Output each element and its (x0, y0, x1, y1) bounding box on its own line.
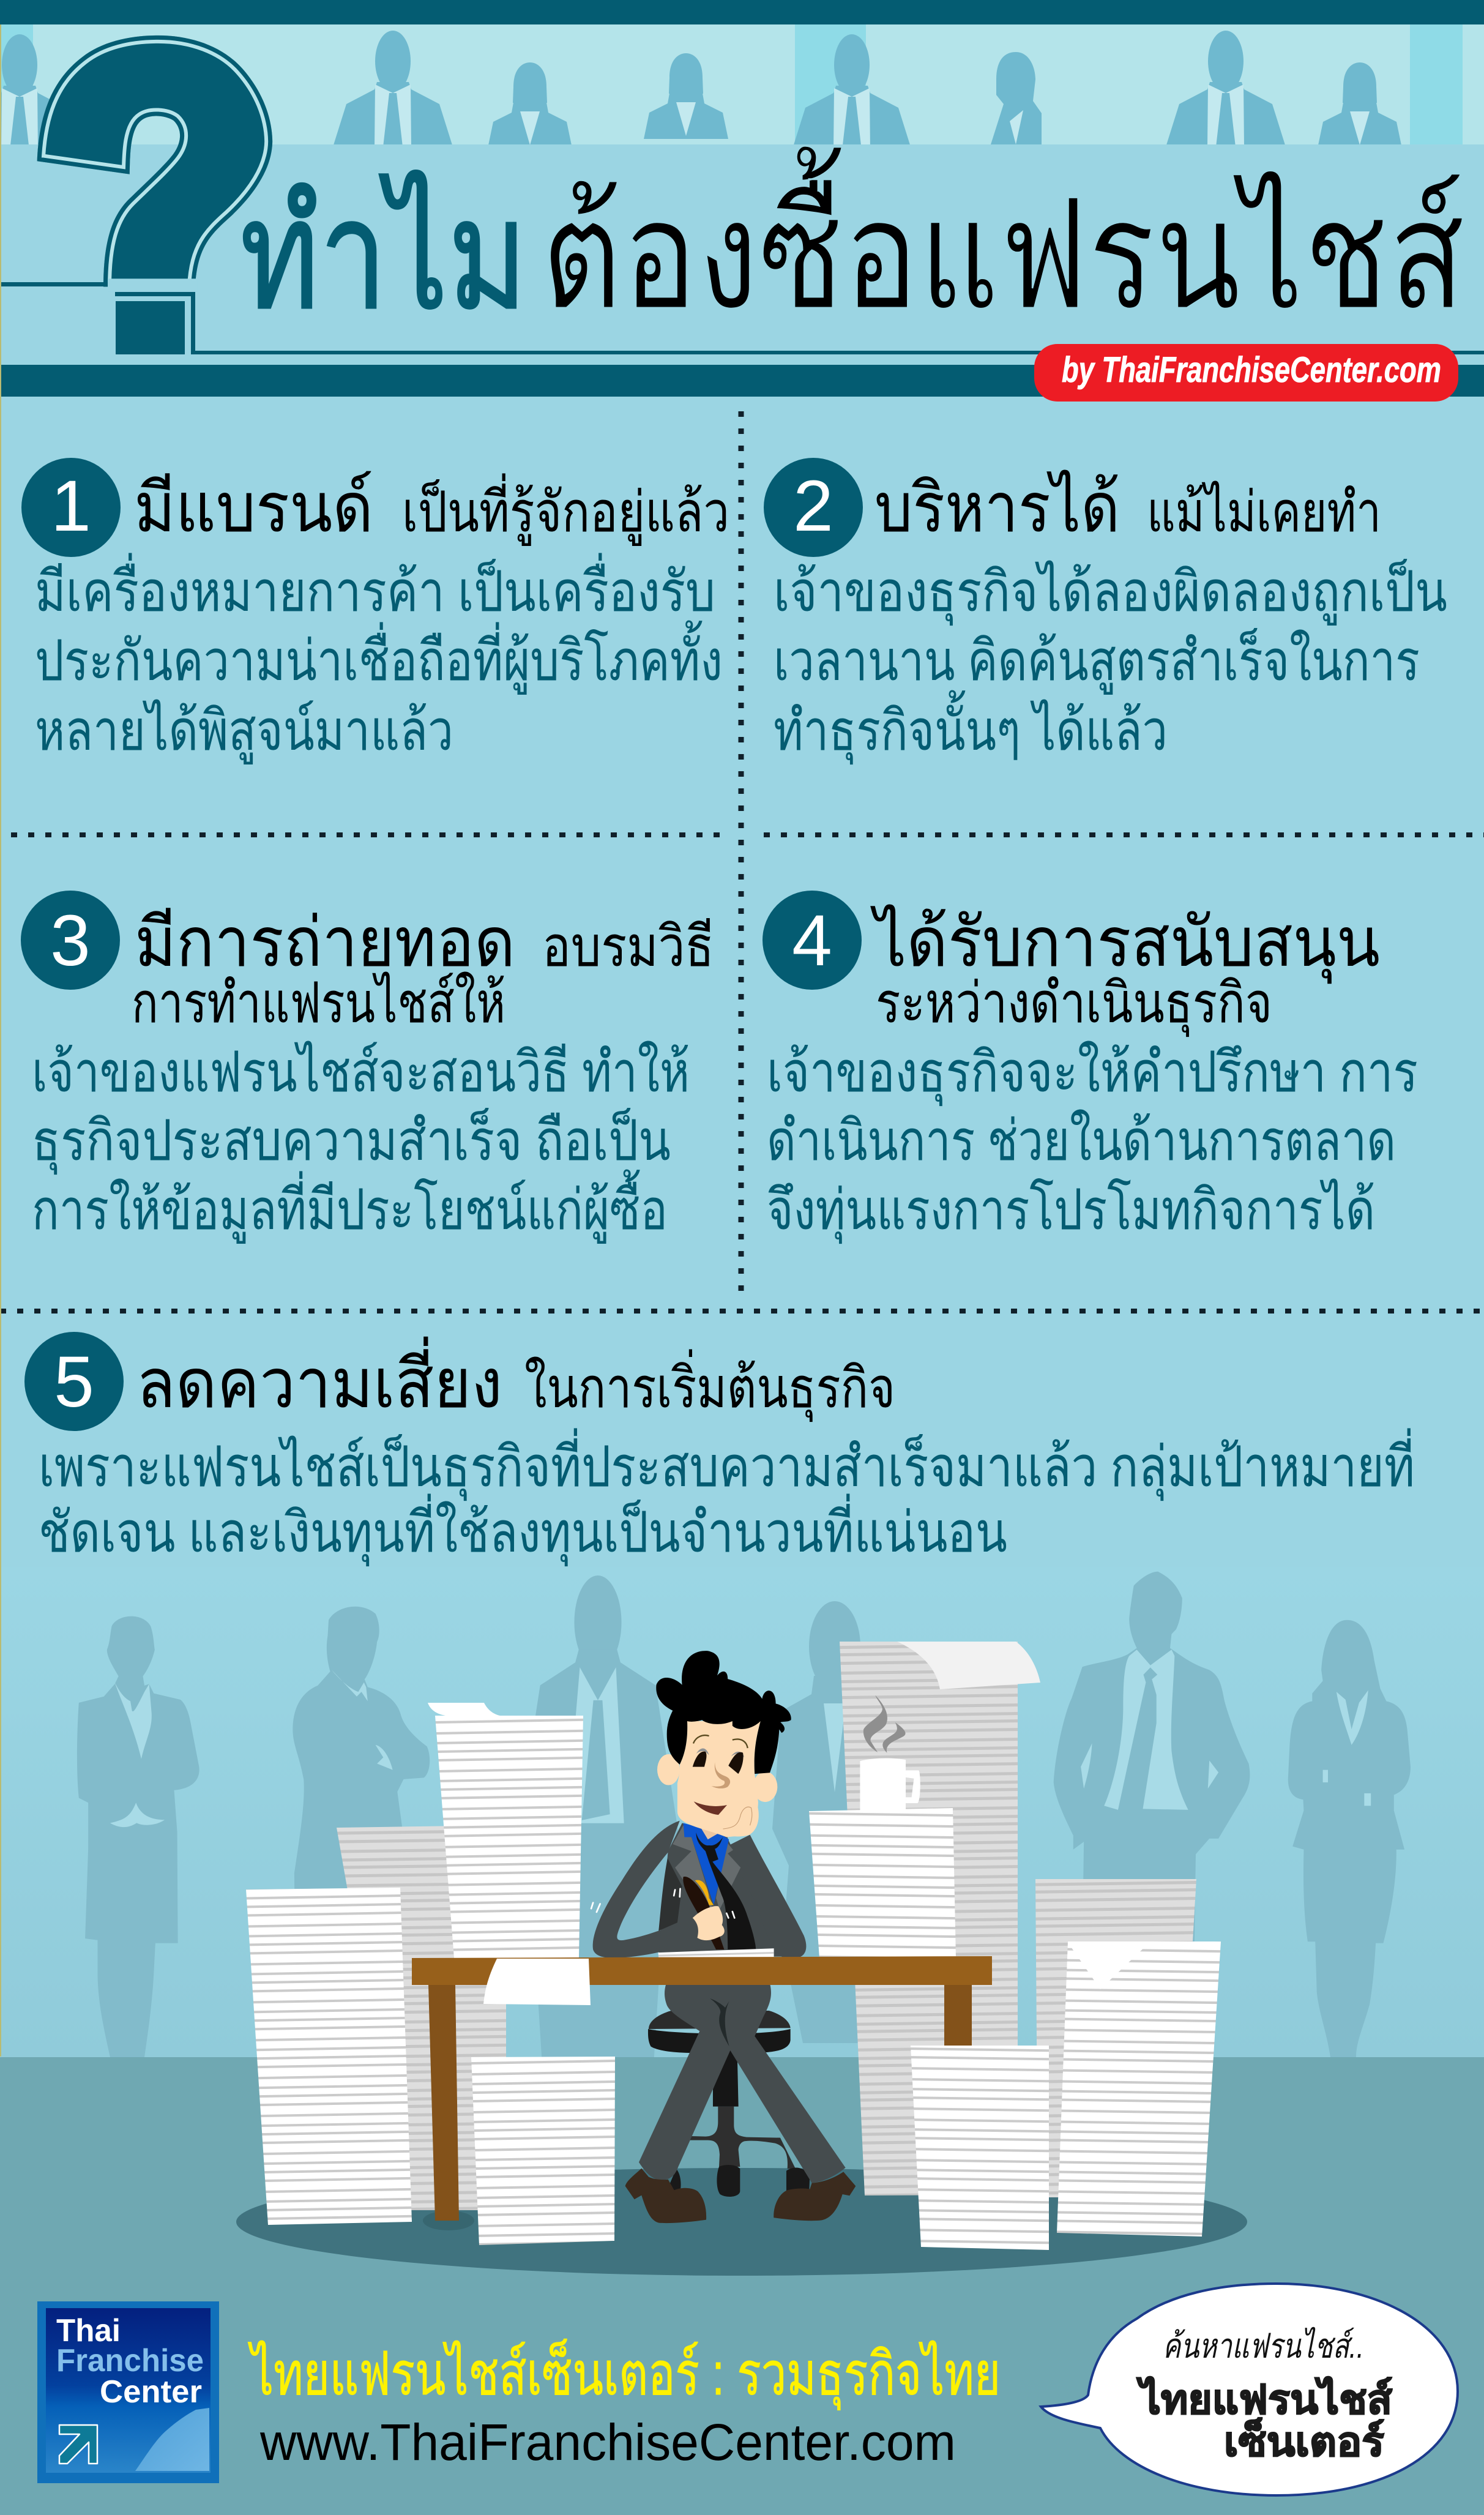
wall tint (1, 1567, 1484, 2057)
logo: Thai Franchise Center: Center (100, 2374, 202, 2410)
front paper stacks (246, 1888, 1221, 2250)
icon: question mark (0, 36, 272, 354)
number badge 3: 3 (50, 900, 91, 981)
number badge 2 (764, 458, 863, 557)
illustration: businessman at desk (591, 1651, 920, 2223)
number badge 5 (24, 1332, 124, 1431)
heading 3: การทำแฟรนไชส์ให้ (132, 972, 505, 1034)
number badge 5: 5 (54, 1342, 94, 1422)
number badge 1: 1 (51, 466, 91, 547)
logo: Thai Franchise Center: Thai (56, 2313, 121, 2349)
silhouette: woman behind stack (772, 1601, 897, 2043)
heading 3 (132, 904, 714, 1034)
silhouette: woman in skirt suit (1288, 1620, 1411, 2057)
title: ทำไม (240, 170, 528, 340)
body 3: การให้ข้อมูลที่มีประโยชน์แก่ผู้ซื้อ (32, 1169, 668, 1244)
desk (412, 1956, 992, 2230)
speech bubble (1041, 2284, 1458, 2495)
body 5: ชัดเจน และเงินทุนที่ใช้ลงทุนเป็นจำนวนที่แน่นอน (39, 1493, 1007, 1567)
upper body (591, 1651, 920, 1958)
silhouette: woman in coat (77, 1616, 199, 2057)
body 1: มีเครื่องหมายการค้า เป็นเครื่องรับ (35, 553, 715, 623)
header rule (191, 292, 1484, 354)
heading 3: อบรมวิธี (542, 916, 714, 978)
heading 2: บริหารได้ (874, 469, 1120, 546)
panel 4 (763, 891, 1418, 1244)
body 1 (35, 553, 723, 764)
heading 2: แม้ไม่เคยทำ (1147, 481, 1381, 544)
floor shadow (236, 2168, 1247, 2276)
heading 3: มีการถ่ายทอด (135, 904, 515, 981)
dotted dividers (0, 411, 1484, 1311)
body 1: หลายได้พิสูจน์มาแล้ว (35, 700, 453, 764)
silhouette: man with hands in pockets (1054, 1572, 1250, 2057)
mug (860, 1758, 906, 1810)
number badge 4 (763, 891, 862, 990)
silhouette: man with folded arms (293, 1607, 430, 2057)
silhouette: centre man (516, 1575, 680, 2057)
left edge line (0, 24, 1, 2057)
dark band (0, 365, 1484, 397)
heading 4: ระหว่างดำเนินธุรกิจ (876, 972, 1272, 1037)
heading 5: ลดความเสี่ยง (136, 1336, 502, 1422)
heading 1 (134, 469, 729, 546)
floor (0, 2057, 1484, 2515)
body 4 (767, 1041, 1418, 1244)
footer text: www.ThaiFranchiseCenter.com (259, 2413, 956, 2471)
body 2 (774, 558, 1447, 765)
body 5 (39, 1428, 1415, 1567)
heading 1: มีแบรนด์ (134, 469, 373, 546)
heading 2 (874, 469, 1381, 546)
panel 1 (21, 458, 729, 764)
top bar (0, 0, 1484, 24)
speech bubble: เซ็นเตอร์ (1224, 2417, 1384, 2464)
steam (863, 1695, 887, 1752)
badge: by ThaiFranchiseCenter.com (1034, 344, 1458, 402)
grey paper stacks (337, 1642, 1196, 2210)
title (240, 146, 1465, 340)
number badge 2: 2 (793, 466, 833, 547)
heading 4: ได้รับการสนับสนุน (870, 904, 1380, 984)
heading 5 (136, 1336, 895, 1422)
number badge 4: 4 (792, 900, 832, 981)
heading 5: ในการเริ่มต้นธุรกิจ (524, 1349, 895, 1422)
background silhouettes of business people (77, 1572, 1411, 2057)
heading 1: เป็นที่รู้จักอยู่แล้ว (402, 473, 729, 546)
logo: Thai Franchise Center (37, 2301, 219, 2483)
number badge 3 (21, 891, 120, 990)
header: silhouette band (0, 24, 1484, 151)
body 1: ประกันความน่าเชื่อถือที่ผู้บริโภคทั้ง (35, 620, 723, 695)
body 3: เจ้าของแฟรนไชส์จะสอนวิธี ทำให้ (32, 1041, 690, 1104)
panel 2 (764, 458, 1447, 765)
curled sheet (897, 1642, 1040, 1689)
panel 3 (21, 891, 714, 1244)
body 2: ทำธุรกิจนั้นๆ ได้แล้ว (774, 690, 1168, 765)
tall paper stacks behind desk (428, 1703, 956, 1958)
panel 5 (24, 1332, 1415, 1567)
footer text (248, 2339, 1001, 2471)
chair and crossed legs (625, 1984, 856, 2223)
footer text: ไทยแฟรนไชส์เซ็นเตอร์ : รวมธุรกิจไทย (248, 2339, 1001, 2410)
speech bubble: ไทยแฟรนไชส์ (1136, 2376, 1393, 2422)
icon: arrow (59, 2425, 97, 2464)
speech bubble: ค้นหาแฟรนไชส์.. (1163, 2326, 1364, 2365)
logo: Thai Franchise Center: Franchise (56, 2343, 204, 2379)
body 3 (32, 1041, 690, 1244)
heading 4 (870, 904, 1380, 1037)
number badge 1 (21, 458, 121, 557)
body 3: ธุรกิจประสบความสำเร็จ ถือเป็น (32, 1107, 671, 1175)
